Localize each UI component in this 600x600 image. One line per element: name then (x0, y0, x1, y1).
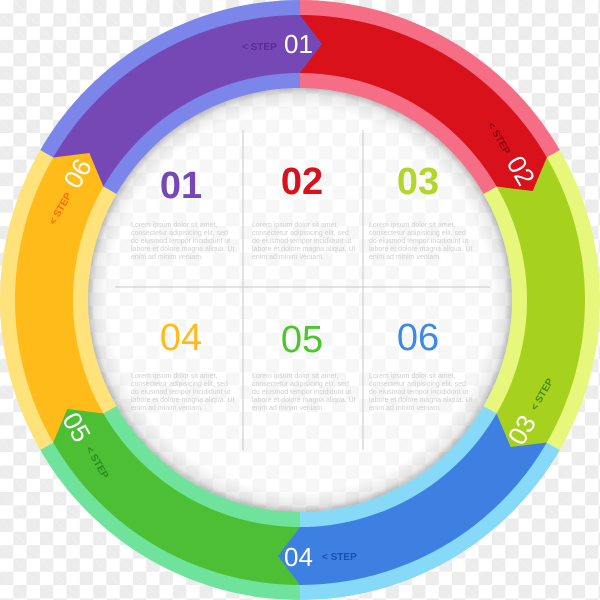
lorem text blocks: Lorem ipsum dolor sit amet, (252, 373, 338, 380)
numbers: 01 (160, 165, 202, 207)
step labels: 01 (284, 29, 313, 59)
lorem text blocks: Lorem ipsum dolor sit amet, (369, 373, 455, 380)
inner disc (88, 88, 512, 512)
lorem text blocks: consectetur adipisicing elit, sed (369, 230, 466, 237)
lorem text blocks: enim ad minim veniam. (131, 254, 203, 261)
lorem text blocks: do eiusmod tempor incididunt ut (369, 389, 468, 396)
lorem text blocks: enim ad minim veniam. (369, 254, 441, 261)
lorem text blocks: enim ad minim veniam. (131, 405, 203, 412)
numbers: 05 (281, 319, 323, 361)
step labels: < STEP (485, 121, 512, 157)
lorem text blocks: Lorem ipsum dolor sit amet, (131, 373, 217, 380)
lorem text blocks: do eiusmod tempor incididunt ut (252, 389, 351, 396)
lorem text blocks: consectetur adipisicing elit, sed (131, 381, 228, 388)
lorem text blocks: labore et dolore magna aliqua. Ut (131, 397, 235, 404)
numbers (160, 161, 439, 361)
segment: blue 04 (262, 353, 560, 600)
lorem text blocks: labore et dolore magna aliqua. Ut (369, 246, 473, 253)
lorem text blocks: enim ad minim veniam. (369, 405, 441, 412)
step labels: < STEP (322, 552, 357, 563)
lorem text blocks: Lorem ipsum dolor sit amet, (252, 222, 338, 229)
step labels: 06 (57, 153, 98, 193)
numbers: 06 (397, 317, 439, 359)
step labels: 03 (502, 410, 542, 450)
lorem text blocks: enim ad minim veniam. (252, 405, 324, 412)
numbers: 04 (160, 317, 202, 359)
lorem text blocks: enim ad minim veniam. (252, 254, 324, 261)
segment: yellow-green 03 (392, 150, 600, 472)
step labels (36, 29, 564, 572)
step labels: < STEP (48, 191, 75, 227)
lorem text blocks: consectetur adipisicing elit, sed (252, 381, 349, 388)
lorem text blocks: labore et dolore magna aliqua. Ut (369, 397, 473, 404)
lorem text blocks: consectetur adipisicing elit, sed (369, 381, 466, 388)
segment: green 05 (40, 406, 300, 600)
lorem text blocks: Lorem ipsum dolor sit amet, (369, 222, 455, 229)
lorem text blocks (131, 222, 473, 412)
segment: red 02 (300, 0, 560, 194)
step labels: 02 (501, 151, 541, 191)
numbers: 02 (281, 161, 323, 203)
step labels: 04 (284, 542, 313, 572)
segment: yellow 06 (0, 128, 208, 450)
lorem text blocks: labore et dolore magna aliqua. Ut (131, 246, 235, 253)
lorem text blocks: do eiusmod tempor incididunt ut (131, 389, 230, 396)
step labels: < STEP (242, 42, 277, 53)
numbers: 03 (397, 161, 439, 203)
lorem text blocks: consectetur adipisicing elit, sed (252, 230, 349, 237)
grid lines (115, 130, 490, 450)
lorem text blocks: labore et dolore magna aliqua. Ut (252, 246, 356, 253)
step labels: 05 (56, 407, 97, 447)
step labels: < STEP (83, 445, 110, 481)
segment: purple 01 (40, 0, 338, 247)
lorem text blocks: labore et dolore magna aliqua. Ut (252, 397, 356, 404)
step labels: < STEP (529, 377, 556, 412)
lorem text blocks: do eiusmod tempor incididunt ut (252, 238, 351, 245)
lorem text blocks: consectetur adipisicing elit, sed (131, 230, 228, 237)
lorem text blocks: Lorem ipsum dolor sit amet, (131, 222, 217, 229)
lorem text blocks: do eiusmod tempor incididunt ut (369, 238, 468, 245)
lorem text blocks: do eiusmod tempor incididunt ut (131, 238, 230, 245)
